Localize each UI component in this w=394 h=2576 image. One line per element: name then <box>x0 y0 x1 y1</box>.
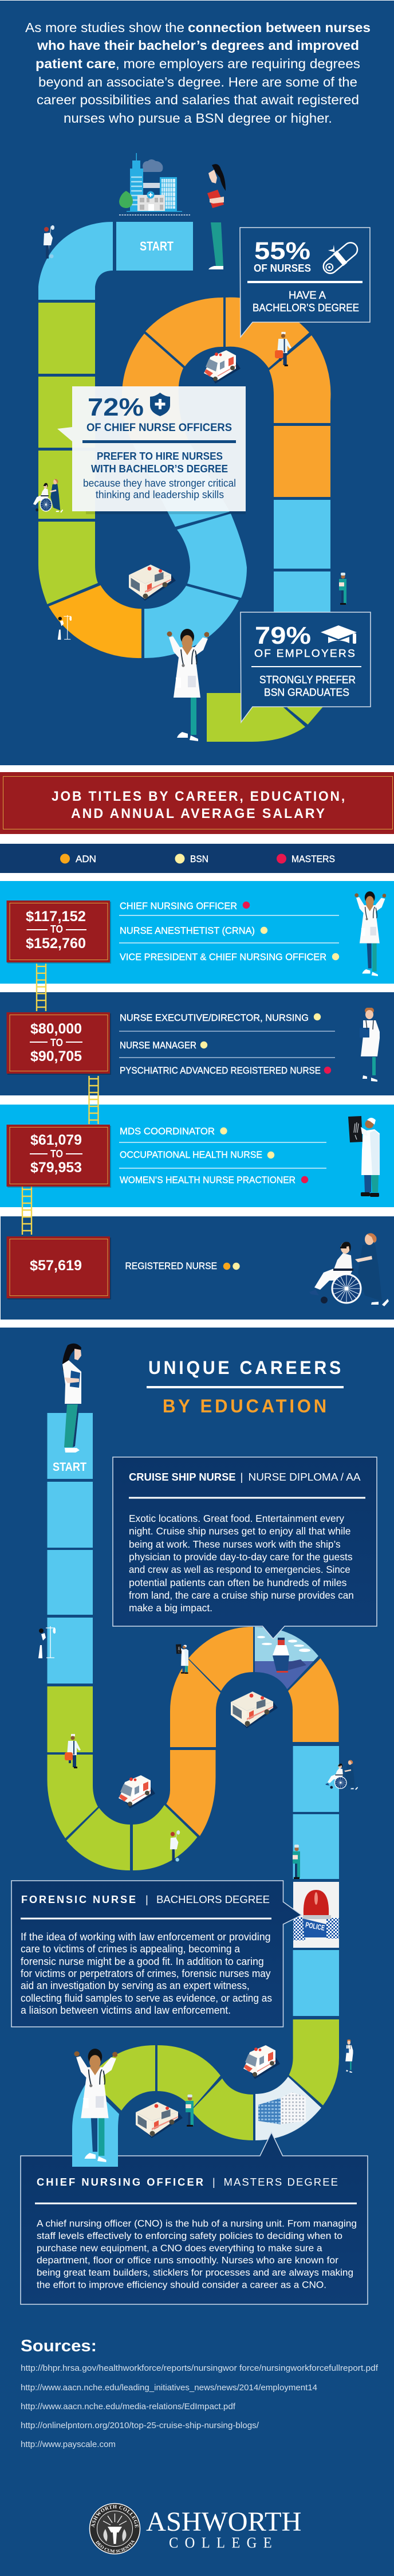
panel: forensic nurse <box>11 1881 301 2027</box>
icon: nurse with IV stand <box>44 225 54 259</box>
panel title: CHIEF NURSING OFFICER <box>37 2176 205 2188</box>
orange arch top-left <box>145 297 223 366</box>
blue bottom tile <box>144 586 239 658</box>
college wordmark: ASHWORTH <box>146 2507 301 2537</box>
panel body text: physician to provide day-to-day care for the guests <box>129 1551 353 1563</box>
salary box two <box>7 1012 111 1075</box>
legend: Masters: MASTERS <box>291 854 335 864</box>
salary box one: TO <box>50 923 63 935</box>
callout: 79 percent of employers <box>241 612 371 722</box>
intro paragraph: patient care <box>36 56 116 71</box>
intro paragraph: connection between nurses <box>188 20 371 35</box>
79 percent figure: 79% <box>255 622 311 649</box>
panel body text: forensic nurse might be a good fit. In addition to caring <box>21 1956 264 1967</box>
icon: doctor with raised arms <box>167 629 210 741</box>
college seal <box>89 2503 141 2554</box>
green tile 3 <box>66 1808 130 1870</box>
panel title: BACHELORS DEGREE <box>156 1893 270 1905</box>
icon: wheelchair patient <box>325 1760 358 1790</box>
job list second tier: NURSE EXECUTIVE/DIRECTOR, NURSING <box>120 1012 309 1023</box>
orange right tile <box>274 426 330 497</box>
panel body text: staff levels effectively to enforcing safety policies to deciding when to <box>37 2230 342 2241</box>
source urls <box>21 2364 379 2449</box>
college seal: DEO CUM SCIENTIA <box>96 2540 135 2553</box>
job list second tier: PYSCHIATRIC ADVANCED REGISTERED NURSE <box>120 1065 321 1076</box>
salary box three: $79,953 <box>30 1160 82 1176</box>
blue tile 5 <box>293 1746 339 1812</box>
panel body text <box>21 1931 272 2016</box>
legend: ADN: ADN <box>76 854 96 864</box>
heading: unique careers by education <box>147 1357 344 1416</box>
panel body text: If the idea of working with law enforcement or providing <box>21 1931 271 1943</box>
section: unique careers by education <box>0 1328 394 2576</box>
ladder two <box>89 1076 98 1124</box>
figure: nurse manager <box>360 1007 380 1082</box>
sources heading: Sources: <box>21 2337 97 2355</box>
row band top tier <box>0 881 394 984</box>
salary box one: $117,152 <box>26 909 86 925</box>
icon: doctor with bag <box>275 332 291 366</box>
green tile 2 <box>47 1755 98 1838</box>
orange tile 2 <box>170 1659 220 1747</box>
job list fourth tier: REGISTERED NURSE <box>125 1260 217 1271</box>
icon: ambulance left <box>136 2102 183 2138</box>
job list third tier: OCCUPATIONAL HEALTH NURSE <box>120 1149 262 1160</box>
green S tile 2 <box>157 2045 220 2108</box>
ladder three <box>22 1187 31 1235</box>
board game path <box>38 222 330 742</box>
blue tile 7 <box>293 1950 339 2016</box>
source urls: http://bhpr.hrsa.gov/healthworkforce/reports/nursingwor force/nursingworkforcefullreport.pdf <box>21 2364 379 2373</box>
72 percent figure: 72% <box>88 393 144 421</box>
callout statement: BSN GRADUATES <box>264 687 349 698</box>
legend: ADN <box>60 854 96 864</box>
intro paragraph: nurses who pursue a BSN degree or higher. <box>64 111 332 126</box>
job list third tier: MDS COORDINATOR <box>120 1126 215 1137</box>
row band fourth tier <box>1 1216 394 1320</box>
panel body text <box>37 2218 357 2291</box>
section: why a BSN matters <box>0 1 394 765</box>
job list third tier: WOMEN’S HEALTH NURSE PRACTIONER <box>120 1175 296 1185</box>
college wordmark <box>146 2507 301 2551</box>
heading: unique careers by education: BY EDUCATION <box>163 1396 329 1416</box>
Ashworth College logo <box>89 2503 301 2554</box>
panel body text: night. Cruise ship nurses get to enjoy all that while <box>129 1525 350 1537</box>
icon: wheelchair patient <box>31 479 63 513</box>
start tile <box>47 1413 93 1479</box>
banner: job titles heading <box>0 772 394 834</box>
icon: ambulance centre <box>231 1692 278 1728</box>
police light tile <box>293 1882 339 1948</box>
green tile 4 <box>133 1805 197 1870</box>
panel title: MASTERS DEGREE <box>223 2176 339 2188</box>
panel title: | <box>145 1893 148 1905</box>
callout reason: because they have stronger critical <box>83 477 236 489</box>
panel body text <box>129 1513 354 1614</box>
section background <box>0 1328 394 2576</box>
panel title: CRUISE SHIP NURSE <box>129 1471 236 1483</box>
college seal: ASHWORTH COLLEGE <box>91 2505 139 2528</box>
callout heading: OF CHIEF NURSE OFFICERS <box>86 421 232 434</box>
panel body text: being at work. These nurses work with the ship’s <box>129 1538 341 1550</box>
board game path <box>47 1413 339 2140</box>
job list second tier: NURSE MANAGER <box>120 1040 196 1051</box>
icon: doctor with x-ray <box>176 1644 188 1674</box>
intro paragraph: As more studies show the <box>25 20 184 35</box>
panel title: | <box>212 2176 215 2188</box>
panel title: FORENSIC NURSE <box>21 1893 137 1905</box>
orange tile 4 <box>288 1658 339 1742</box>
orange arch top-right <box>226 297 309 368</box>
start tile: START <box>140 239 174 253</box>
orange tile 1 <box>166 1750 215 1836</box>
green tile 1 <box>38 303 95 374</box>
salary box four <box>7 1236 111 1299</box>
panel title: | <box>241 1471 243 1483</box>
icon: diploma scroll <box>316 234 361 277</box>
blue tile behind white box <box>133 444 230 527</box>
callout statement <box>253 289 359 314</box>
panel body text: care to victims of crimes is appealing, becoming a <box>21 1943 241 1955</box>
panel body text: collecting fluid samples to serve as evidence, or acting as <box>21 1992 272 2004</box>
callout statement <box>259 674 356 698</box>
panel body text: department, floor or office runs smoothly. Nurses who are known for <box>37 2255 338 2265</box>
intro paragraph: , more employers are requiring degrees <box>116 56 360 71</box>
dashed ground line <box>119 214 190 216</box>
panel body text: A chief nursing officer (CNO) is the hub of a nursing unit. From managing <box>37 2218 357 2229</box>
icon: nurse with IV stand <box>170 1830 180 1862</box>
intro paragraph: career possibilities and salaries that await registered <box>37 92 359 107</box>
icon: ambulance lower left <box>119 1775 155 1808</box>
intro paragraph <box>25 20 371 126</box>
banner: job titles heading: AND ANNUAL AVERAGE SALARY <box>71 806 326 821</box>
panel body text: aid an investigation by serving as an expert witness, <box>21 1980 250 1991</box>
banner: job titles heading: JOB TITLES BY CAREER, EDUCATION, <box>52 789 346 804</box>
police light tile: POLICE <box>305 1920 326 1932</box>
panel title: NURSE DIPLOMA / AA <box>249 1471 361 1483</box>
icon: ambulance bottom <box>129 565 176 601</box>
green tile 2 <box>38 377 95 448</box>
road tiles upper left <box>38 222 113 300</box>
callout reason <box>83 477 236 500</box>
blue tile 6 <box>293 1814 339 1879</box>
section: job titles by salary <box>0 772 394 1320</box>
panel body text: being great team builders, sticklers for processes and are always making <box>37 2267 353 2278</box>
job list top tier <box>119 901 339 962</box>
salary box two: $90,705 <box>30 1048 82 1064</box>
icon: nurse in scrubs <box>339 573 346 605</box>
green final tile <box>207 693 305 742</box>
panel body text: a liaison between victims and law enforcement. <box>21 2005 231 2016</box>
figure: doctor with x-ray <box>348 1116 380 1197</box>
icon: nurse with folder <box>345 2039 353 2073</box>
green curve tile <box>38 522 98 604</box>
college wordmark: COLLEGE <box>169 2535 278 2551</box>
blue tile 2 <box>47 1482 93 1548</box>
start tile <box>116 222 193 271</box>
salary box three: TO <box>50 1148 63 1160</box>
salary box two: TO <box>50 1037 63 1048</box>
salary box one <box>7 901 111 964</box>
cruise ship tile <box>255 1627 318 1689</box>
panel body text: and crew as well as respond to emergencies. Since <box>129 1564 350 1575</box>
nurse with red clipboard <box>207 164 226 269</box>
salary box three <box>7 1125 111 1188</box>
callout statement: HAVE A <box>289 289 326 301</box>
55 percent figure: 55% <box>254 237 310 265</box>
heading: unique careers by education: UNIQUE CAREERS <box>148 1357 344 1378</box>
panel body text: purchase new equipment, a CNO does everything to make sure a <box>37 2242 322 2254</box>
panel body text: make a big impact. <box>129 1602 212 1614</box>
job list top tier: NURSE ANESTHETIST (CRNA) <box>120 925 255 936</box>
legend: BSN: BSN <box>190 854 208 864</box>
label: of employers: OF EMPLOYERS <box>254 648 356 659</box>
legend bar <box>0 844 394 873</box>
callout statement <box>91 450 228 475</box>
icon: nurse in scrubs <box>186 2095 194 2127</box>
panel title <box>21 1893 270 1905</box>
orange arch left <box>122 334 189 441</box>
panel body text: for victims or perpetrators of crimes, forensic nurses may <box>21 1968 271 1979</box>
orange bottom tile <box>49 585 141 658</box>
blue right tile <box>274 500 330 569</box>
blue rising tile <box>177 514 247 598</box>
intro paragraph: who have their bachelor’s degrees and improved <box>37 38 359 53</box>
source urls: http://www.aacn.nche.edu/media-relations/EdImpact.pdf <box>21 2402 236 2411</box>
callout statement: BACHELOR’S DEGREE <box>253 302 359 314</box>
salary box two: $80,000 <box>30 1021 82 1037</box>
nurse on start tile <box>62 1344 81 1453</box>
figure: chief nursing officer <box>354 891 386 976</box>
legend: BSN <box>175 854 208 864</box>
icon: graduation cap <box>321 625 357 644</box>
section background <box>0 1 394 765</box>
callout statement: WITH BACHELOR’S DEGREE <box>91 463 228 475</box>
green tile 3 <box>38 451 95 519</box>
icon: doctor with bag <box>65 1734 81 1768</box>
green S tile 3 <box>89 2045 155 2111</box>
icon: shield with cross <box>150 393 170 416</box>
source urls: http://www.aacn.nche.edu/leading_initiatives_news/news/2014/employment14 <box>21 2383 317 2393</box>
source urls: http://www.payscale.com <box>21 2440 116 2449</box>
icon: nurse at IV stand <box>58 615 72 640</box>
green S tile 1 <box>191 2078 253 2140</box>
panel body text: from land, the care a cruise ship nurse provides can <box>129 1590 354 1601</box>
blue tile 3 <box>47 1550 93 1615</box>
panel title <box>37 2176 339 2188</box>
icon: ambulance top <box>204 350 241 383</box>
orange arch right <box>269 335 330 423</box>
label: of nurses: OF NURSES <box>254 263 311 274</box>
green tile 1 <box>47 1686 93 1752</box>
callout statement: PREFER TO HIRE NURSES <box>97 450 223 462</box>
ladder one <box>37 964 46 1011</box>
row band third tier <box>0 1105 394 1207</box>
intro paragraph: beyond an associate’s degree. Here are some of the <box>38 75 357 89</box>
panel body text: Exotic locations. Great food. Entertainment every <box>129 1513 344 1524</box>
callout: 72 percent of chief nurse officers <box>57 386 246 514</box>
source urls: http://onlinelpntorn.org/2010/top-25-cruise-ship-nursing-blogs/ <box>21 2421 259 2430</box>
icon: hospital buildings <box>119 153 182 212</box>
callout statement: STRONGLY PREFER <box>259 674 356 686</box>
panel: cruise ship nurse <box>113 1457 377 1639</box>
salary box one: $152,760 <box>26 935 86 952</box>
job list top tier: CHIEF NURSING OFFICER <box>120 901 237 911</box>
start tile: START <box>53 1461 86 1474</box>
green right tile <box>283 688 323 725</box>
row band second tier <box>0 992 394 1095</box>
icon: doctor with raised arms <box>74 2049 118 2162</box>
panel body text: the effort to improve efficiency should consider a career as a CNO. <box>37 2279 326 2291</box>
salary box three: $61,079 <box>30 1132 82 1148</box>
figure: nurse pushing wheelchair <box>309 1233 389 1306</box>
panel body text: potential patients can often be hundreds of miles <box>129 1577 347 1588</box>
green curve right <box>289 2019 339 2105</box>
blue tile 4 <box>47 1618 93 1684</box>
hospital tile <box>255 2077 321 2140</box>
orange tile 3 <box>188 1627 253 1691</box>
job list third tier <box>119 1126 326 1185</box>
callout: 55 percent of nurses <box>240 228 370 337</box>
sources list <box>21 2337 379 2449</box>
blue right tile 2 <box>274 571 330 635</box>
icon: nurse in scrubs <box>293 1845 300 1879</box>
icon: ambulance right <box>243 2045 280 2079</box>
icon: nurse at IV stand <box>38 1626 56 1658</box>
salary box four: $57,619 <box>30 1258 82 1274</box>
job list second tier <box>119 1012 335 1076</box>
callout reason: thinking and leadership skills <box>96 488 224 500</box>
job list top tier: VICE PRESIDENT & CHIEF NURSING OFFICER <box>120 952 326 962</box>
final blue tile overlapping panel <box>72 2082 119 2167</box>
panel: chief nursing officer <box>21 2132 368 2304</box>
panel title <box>129 1471 361 1483</box>
